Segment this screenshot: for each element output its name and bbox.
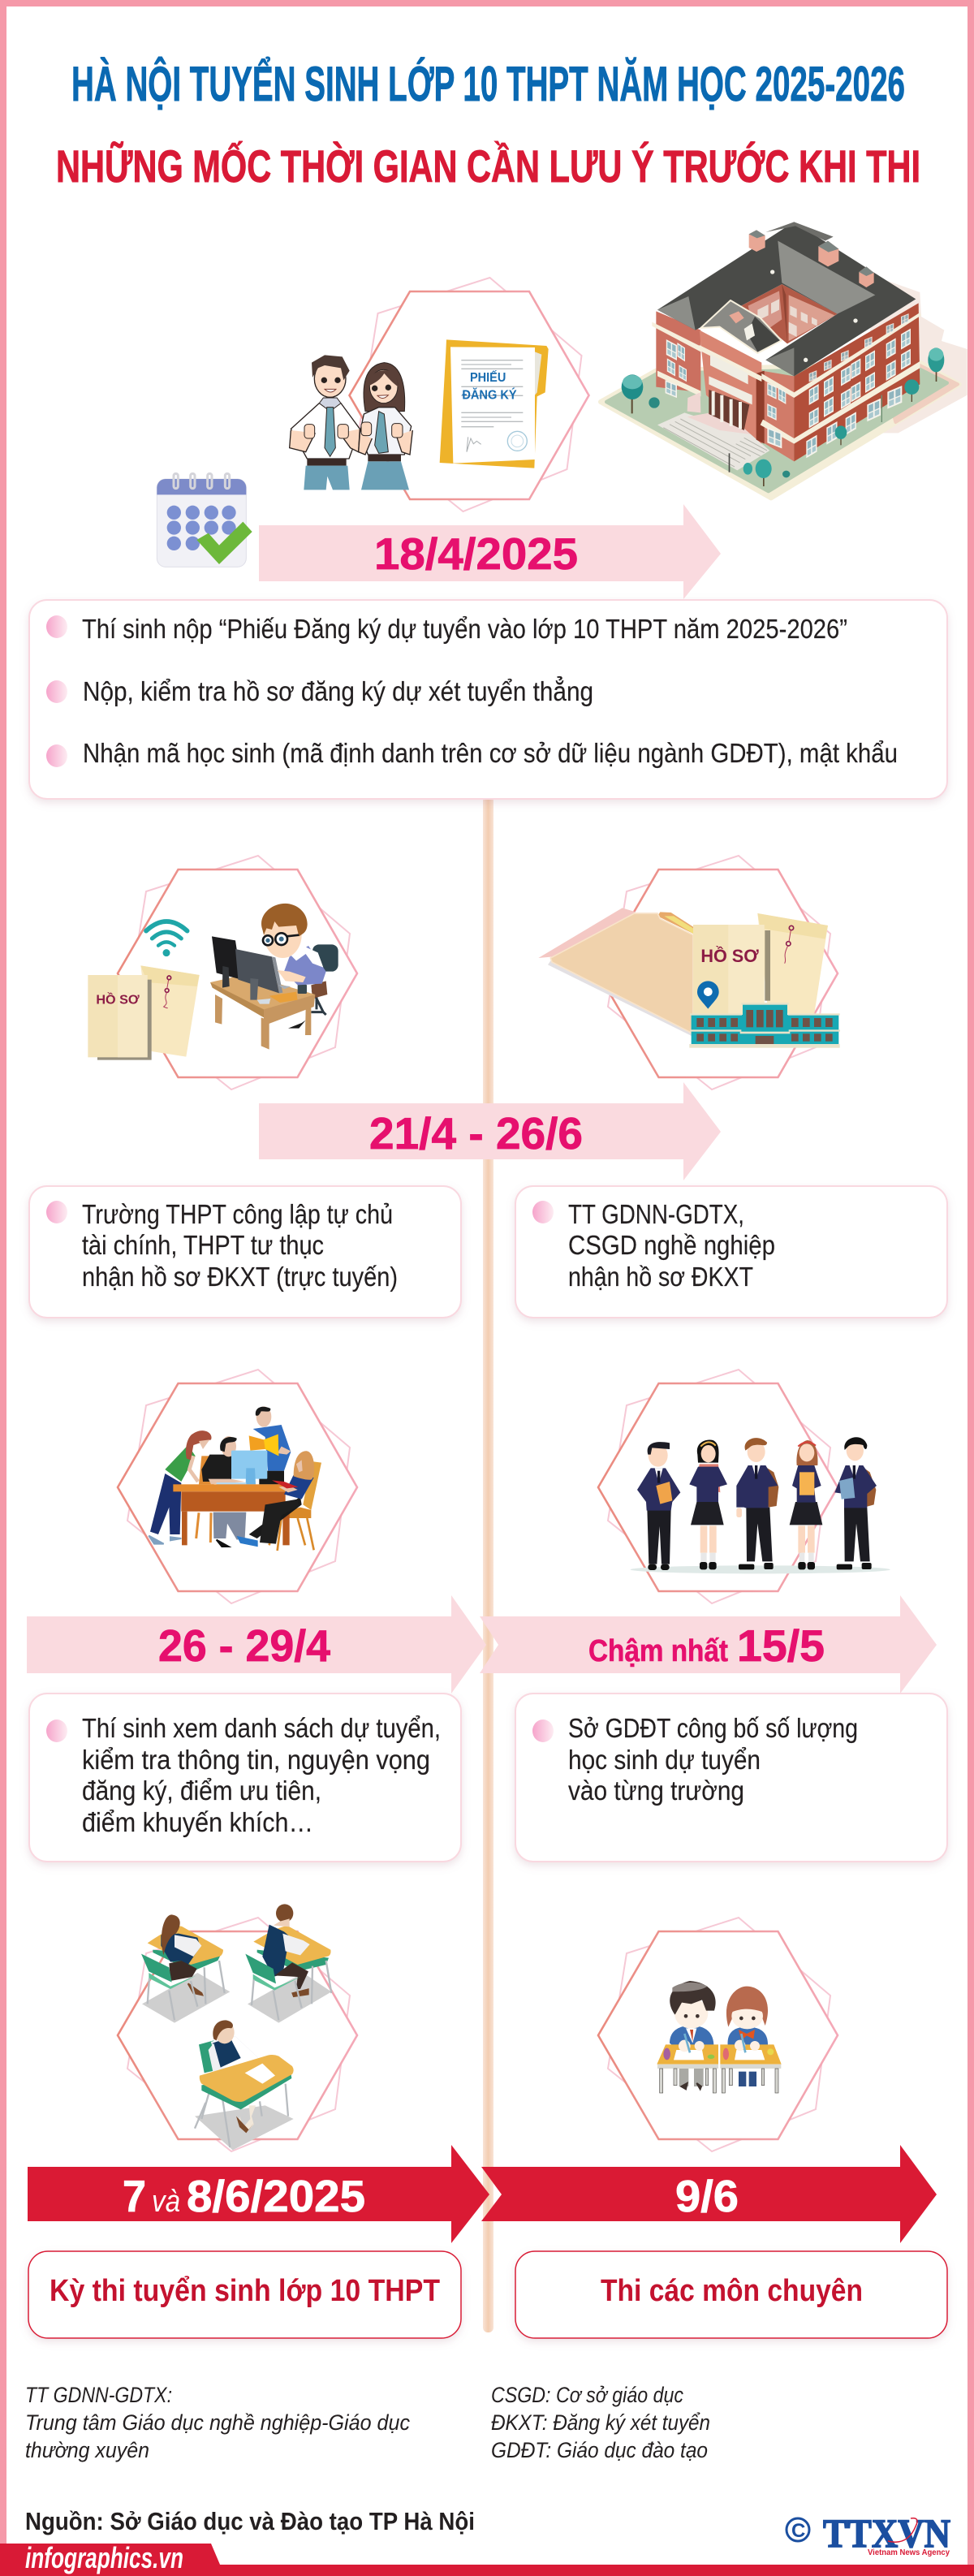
boy bbox=[290, 355, 360, 490]
illustration: school building bbox=[601, 222, 968, 498]
panel: candidate list note bbox=[29, 1694, 461, 1862]
icon: envelope HỒ SƠ: HỒ SƠ bbox=[96, 993, 140, 1008]
icon: wifi bbox=[146, 921, 187, 956]
red arrow: 7 và 8/6/2025 bbox=[28, 2145, 489, 2243]
red arrow: 9/6 bbox=[481, 2145, 937, 2243]
date label: 21/4 - 26/6 bbox=[369, 1108, 583, 1159]
logo: TTXVN: C bbox=[791, 2520, 805, 2542]
panel: entrance exam: Kỳ thi tuyển sinh lớp 10 THPT bbox=[50, 2274, 440, 2308]
logo: TTXVN: Vietnam News Agency bbox=[868, 2548, 950, 2557]
student 2 bbox=[689, 1439, 727, 1569]
text block bbox=[82, 1199, 398, 1292]
text block bbox=[568, 1199, 775, 1292]
illustration: online application bbox=[88, 904, 338, 1060]
desks bbox=[657, 2034, 782, 2093]
hexagon frame: specialised exam bbox=[598, 1918, 838, 2151]
hexagon frame: online application bbox=[118, 856, 357, 1090]
date label bbox=[588, 1620, 825, 1671]
illustration: vocational application folder bbox=[538, 908, 840, 1048]
footnote: left abbreviations: Trung tâm Giáo dục nghề nghiệp-Giáo dục bbox=[25, 2410, 410, 2435]
text block: CSGD nghề nghiệp bbox=[568, 1230, 775, 1260]
student 4 bbox=[790, 1440, 822, 1569]
date label: 18/4/2025 bbox=[374, 529, 578, 579]
student desk top left bbox=[141, 1914, 230, 2023]
text block: TT GDNN-GDTX, bbox=[568, 1199, 744, 1229]
text block bbox=[568, 1713, 858, 1806]
bullet text 1: Thí sinh nộp “Phiếu Đăng ký dự tuyển vào lớp 10 THPT năm 2025-2026” bbox=[82, 614, 847, 644]
footer bar bbox=[0, 2541, 974, 2576]
footnote: right abbreviations: ĐKXT: Đăng ký xét tuyển bbox=[491, 2410, 710, 2435]
text block: đăng ký, điểm ưu tiên, bbox=[82, 1776, 321, 1806]
text block bbox=[82, 1713, 441, 1837]
arrow: 18/4/2025 bbox=[259, 504, 721, 599]
panel: registration notes bbox=[29, 600, 947, 799]
site label: infographics.vn bbox=[25, 2541, 183, 2574]
form title text: ĐĂNG KÝ bbox=[462, 388, 517, 403]
arrow: 26 - 29/4 bbox=[27, 1595, 486, 1694]
illustration: two children writing exam bbox=[657, 1981, 782, 2093]
date label: và bbox=[152, 2185, 180, 2219]
timeline vertical bar bbox=[483, 796, 493, 2332]
source line: Nguồn: Sở Giáo dục và Đào tạo TP Hà Nội bbox=[25, 2507, 475, 2535]
text block: nhận hồ sơ ĐKXT (trực tuyến) bbox=[82, 1262, 398, 1292]
student desk top right bbox=[245, 1904, 331, 2023]
illustration: five students bbox=[631, 1437, 890, 1573]
arrow: chậm nhất 15/5 bbox=[480, 1595, 937, 1694]
bullet text 3: Nhận mã học sinh (mã định danh trên cơ sở dữ liệu ngành GDĐT), mật khẩu bbox=[83, 738, 898, 768]
student 1 bbox=[637, 1442, 680, 1570]
panel: department announcement note bbox=[515, 1694, 947, 1862]
hexagon frame: vocational application bbox=[598, 856, 838, 1090]
girl bbox=[726, 1987, 768, 2086]
text block: Thí sinh xem danh sách dự tuyển, bbox=[82, 1713, 441, 1743]
text block: Sở GDĐT công bố số lượng bbox=[568, 1713, 858, 1743]
arrow: 21/4 - 26/6 bbox=[259, 1082, 721, 1180]
illustration: registration form bbox=[440, 339, 549, 468]
student desk bottom bbox=[195, 2020, 294, 2150]
man at computer bbox=[210, 904, 338, 1050]
panel: entrance exam bbox=[28, 2251, 461, 2338]
logo: TTXVN bbox=[787, 2510, 950, 2557]
footnote: left abbreviations bbox=[25, 2383, 410, 2462]
student 3 bbox=[736, 1438, 778, 1569]
icon: school building bbox=[689, 1003, 840, 1048]
illustration: students at exam desks bbox=[141, 1904, 331, 2150]
hexagon frame: exam bbox=[118, 1918, 357, 2151]
text block: Trường THPT công lập tự chủ bbox=[82, 1199, 393, 1229]
illustration: vocational application folder: HỒ SƠ bbox=[700, 946, 759, 966]
icon: location pin bbox=[697, 981, 719, 1009]
illustration: students thumbs up bbox=[290, 355, 412, 490]
text block: tài chính, THPT tư thục bbox=[82, 1230, 324, 1260]
panel: specialised subjects bbox=[515, 2251, 947, 2338]
hexagon frame: students bbox=[598, 1370, 838, 1603]
date label: 26 - 29/4 bbox=[158, 1620, 330, 1671]
date label: 15/5 bbox=[737, 1620, 825, 1671]
panel: vocational application note bbox=[515, 1186, 947, 1318]
text block: vào từng trường bbox=[568, 1776, 744, 1806]
student 5 bbox=[834, 1437, 877, 1569]
bullet text 2: Nộp, kiểm tra hồ sơ đăng ký dự xét tuyển thẳng bbox=[83, 676, 593, 706]
date label: 7 bbox=[123, 2171, 146, 2221]
text block: học sinh dự tuyển bbox=[568, 1745, 761, 1775]
illustration: group at table bbox=[149, 1406, 321, 1551]
hexagon frame: registration bbox=[349, 278, 589, 511]
girl bbox=[359, 363, 412, 490]
panel: online application note bbox=[29, 1186, 461, 1318]
logo: TTXVN: TTXVN bbox=[823, 2510, 950, 2556]
text block: kiểm tra thông tin, nguyện vọng bbox=[82, 1745, 430, 1775]
footnote: right abbreviations: GDĐT: Giáo dục đào tạo bbox=[491, 2438, 708, 2462]
footnote: left abbreviations: TT GDNN-GDTX: bbox=[25, 2383, 172, 2407]
text block: nhận hồ sơ ĐKXT bbox=[568, 1262, 753, 1292]
form title text: PHIẾU bbox=[470, 371, 506, 385]
boy bbox=[670, 1981, 716, 2089]
footnote: left abbreviations: thường xuyên bbox=[25, 2438, 149, 2462]
text block: điểm khuyến khích… bbox=[82, 1807, 313, 1837]
footnote: right abbreviations: CSGD: Cơ sở giáo dục bbox=[491, 2383, 683, 2407]
icon: calendar with check bbox=[157, 473, 252, 567]
date label: 9/6 bbox=[675, 2171, 739, 2221]
date label: 8/6/2025 bbox=[187, 2171, 365, 2221]
icon: envelope HỒ SƠ bbox=[88, 965, 200, 1060]
form title text bbox=[462, 371, 517, 403]
hexagon frame: group review bbox=[118, 1370, 357, 1603]
panel: specialised subjects: Thi các môn chuyên bbox=[601, 2274, 863, 2308]
footnote: right abbreviations bbox=[491, 2383, 710, 2462]
date label: Chậm nhất bbox=[588, 1634, 728, 1668]
